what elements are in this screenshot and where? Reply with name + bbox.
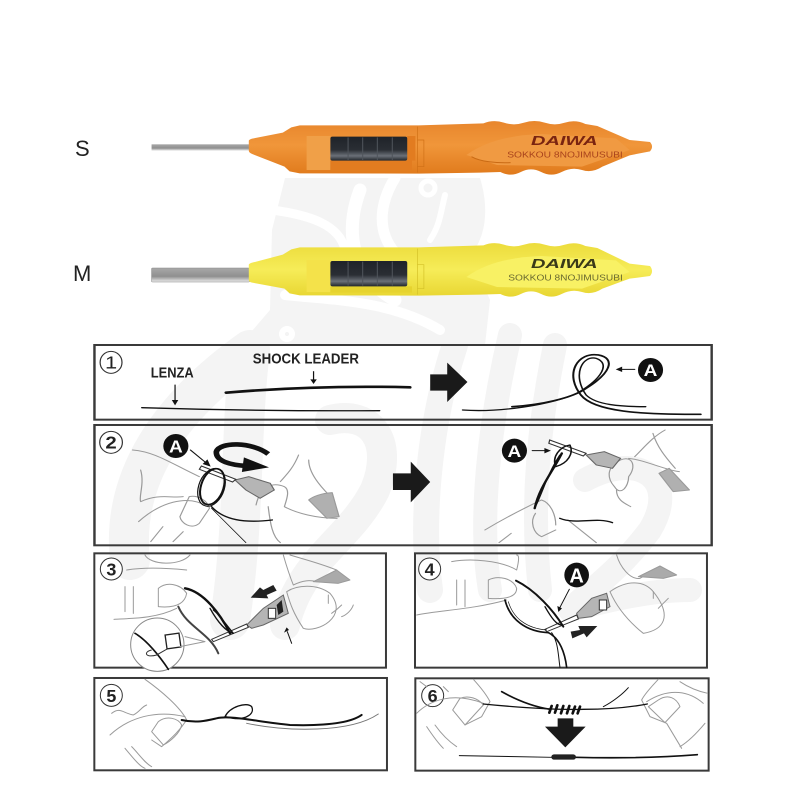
number 2: 2: [105, 434, 117, 453]
badge A: [564, 563, 589, 587]
tool: yellow M: [152, 243, 652, 297]
number 6: [422, 685, 444, 707]
arrow: pull: [571, 626, 597, 638]
label: S: S: [75, 136, 90, 161]
number 1: [100, 351, 122, 373]
arrow: to pin: [190, 450, 211, 467]
number 6: 6: [428, 686, 438, 706]
number 3: [100, 558, 122, 580]
big arrow: [430, 363, 467, 402]
left hand: [417, 679, 490, 748]
panel: step 5: [94, 678, 387, 770]
number 2: [100, 431, 122, 453]
arrow: to A: [616, 367, 635, 372]
big arrow: [545, 718, 586, 747]
logo: Daiwa: DAIWA: [531, 256, 598, 271]
logo: Daiwa: DAIWA: [531, 133, 598, 148]
big arrow: [393, 462, 430, 502]
shock leader line: [226, 387, 410, 393]
knot with loop: [182, 705, 378, 729]
right hand: [642, 679, 708, 748]
badge A: A: [644, 361, 657, 380]
arrow: lenza pointer: [172, 385, 178, 405]
number 4: [419, 558, 441, 580]
number 3: 3: [106, 559, 116, 579]
line loops: [505, 581, 567, 667]
line loops: [178, 588, 233, 653]
arrow: to loop: [557, 589, 569, 612]
tool with loop: [535, 440, 621, 523]
panel: step 4: [415, 553, 707, 668]
inset magnifier: [131, 618, 205, 671]
number 5: 5: [106, 686, 116, 706]
panel: step 3: [94, 553, 386, 671]
tool: [545, 593, 610, 632]
badge A: [502, 439, 527, 463]
arrow: curved rotation: [216, 444, 269, 472]
badge A: [163, 434, 188, 458]
left hands: [133, 450, 339, 543]
black band: [330, 137, 407, 161]
panel: step 6: [415, 678, 709, 771]
right result hands: [485, 430, 689, 543]
panel: step 2: [94, 425, 712, 545]
badge A: A: [169, 438, 183, 457]
number 5: [100, 684, 122, 706]
arrow: shock leader pointer: [310, 372, 317, 384]
watermark: fish and script logo: [129, 178, 690, 625]
tool: [212, 595, 288, 642]
knot wraps top: [483, 688, 647, 713]
label: M: M: [73, 261, 91, 286]
number 4: 4: [425, 559, 435, 579]
lenza line: [142, 408, 380, 411]
tool with ring: [193, 466, 274, 543]
loop knot: [463, 355, 701, 414]
hands: [417, 555, 677, 633]
number 1: 1: [105, 353, 117, 373]
badge A: A: [508, 442, 521, 461]
label: shock leader: SHOCK LEADER: [253, 351, 359, 367]
model name: SOKKOU 8NOJIMUSUBI: [507, 149, 623, 159]
arrow: pointer: [284, 627, 292, 643]
tool: orange S: [152, 121, 652, 175]
finished knot: [459, 755, 697, 758]
badge A: [638, 358, 663, 382]
panel: step 1: [94, 345, 712, 420]
black band: [330, 261, 407, 286]
hands: [114, 555, 353, 629]
label: lenza: LENZA: [151, 365, 194, 381]
model name: SOKKOU 8NOJIMUSUBI: [508, 272, 623, 282]
arrow: to pin: [532, 448, 551, 453]
hand: [110, 679, 187, 768]
arrow: push: [251, 585, 277, 598]
badge A: A: [569, 565, 584, 587]
